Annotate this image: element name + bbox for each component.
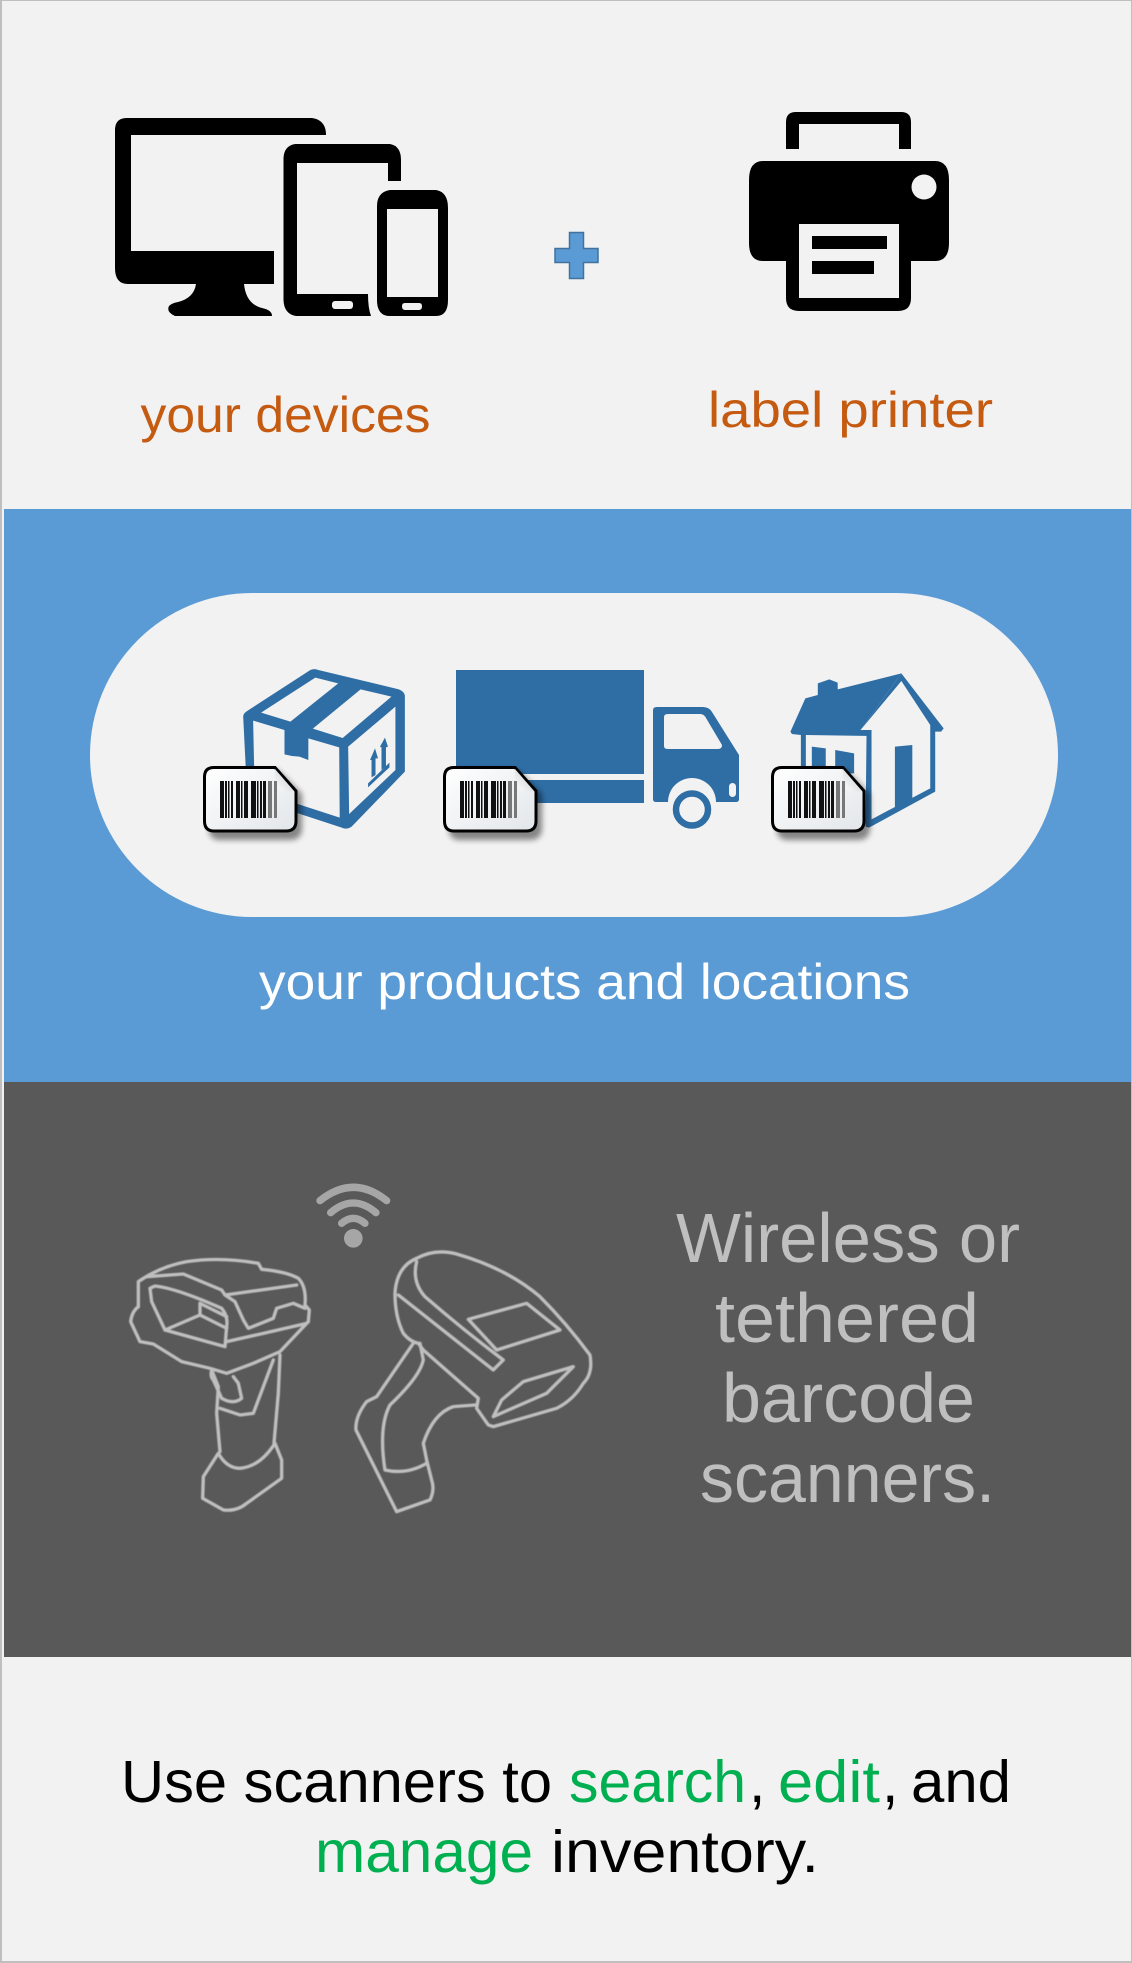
text: wireless or tethered barcode scanners: Wireless or xyxy=(676,1199,1020,1277)
icon: barcode label on truck xyxy=(444,768,542,840)
icon: handheld barcode scanner xyxy=(356,1252,591,1512)
icon: tablet xyxy=(284,144,401,316)
text: use scanners to search, edit, and manage inventory: Use scanners to xyxy=(121,1749,552,1815)
text: use scanners to search, edit, and manage inventory: search xyxy=(569,1749,746,1815)
panel: barcode scanners xyxy=(4,1082,1131,1657)
icon: label printer xyxy=(749,112,949,311)
text: use scanners to search, edit, and manage inventory xyxy=(121,1749,1011,1885)
panel: devices and printer xyxy=(115,112,993,443)
label: your devices: your devices xyxy=(140,387,430,443)
white pill container xyxy=(90,593,1058,917)
icon: desktop monitor xyxy=(115,118,326,316)
text: use scanners to search, edit, and manage inventory: inventory. xyxy=(551,1819,819,1885)
panel: products and locations xyxy=(4,509,1131,1082)
icon: barcode label on box xyxy=(204,768,302,840)
icon: cardboard box xyxy=(243,669,405,829)
text: wireless or tethered barcode scanners: scanners. xyxy=(700,1439,995,1517)
icon: wifi signal xyxy=(320,1187,387,1248)
text: use scanners to search, edit, and manage inventory: , xyxy=(749,1749,765,1815)
text: use scanners to search, edit, and manage inventory: edit xyxy=(778,1749,880,1815)
text: use scanners to search, edit, and manage inventory: and xyxy=(911,1749,1011,1815)
icon: smartphone xyxy=(377,190,448,316)
label: label printer: label printer xyxy=(708,382,993,438)
icon: upright barcode scanner xyxy=(131,1260,309,1510)
text: wireless or tethered barcode scanners: barcode xyxy=(722,1359,975,1437)
icon: barcode label on house xyxy=(772,768,870,840)
text: wireless or tethered barcode scanners: tethered xyxy=(715,1279,979,1357)
icon: delivery truck xyxy=(456,670,739,826)
text: wireless or tethered barcode scanners xyxy=(676,1199,1020,1517)
icon: tablet button xyxy=(332,301,353,309)
label: your products and locations: your products and locations xyxy=(259,954,910,1010)
icon: plus sign xyxy=(555,232,598,278)
text: use scanners to search, edit, and manage inventory: manage xyxy=(315,1819,533,1885)
icon: house xyxy=(790,673,944,828)
text: use scanners to search, edit, and manage inventory: , xyxy=(882,1749,898,1815)
